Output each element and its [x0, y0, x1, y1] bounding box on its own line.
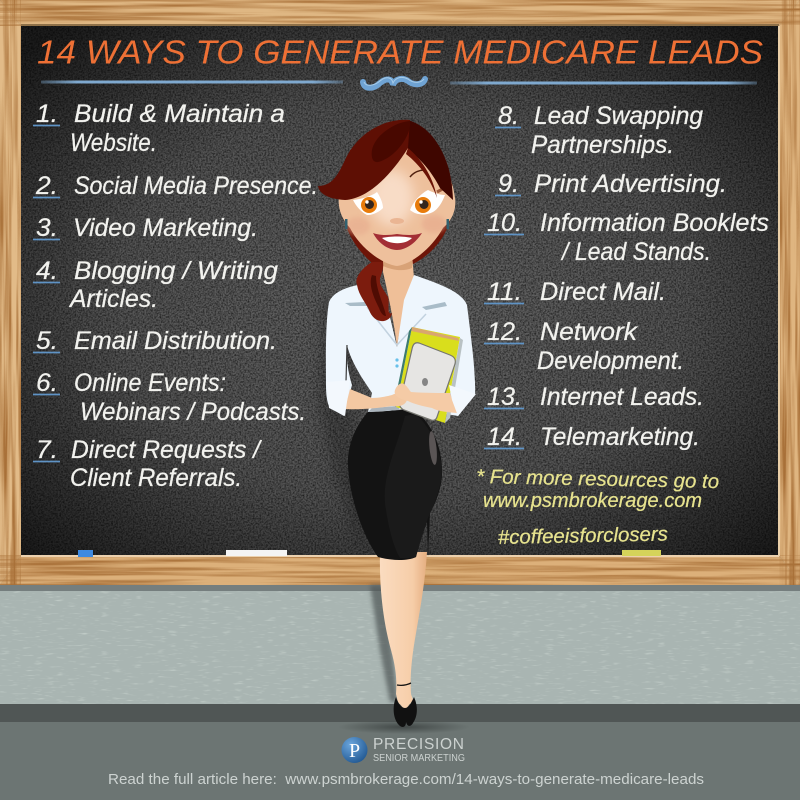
list item 5: 5. — [36, 327, 58, 355]
legs — [380, 552, 427, 710]
blue chalk — [78, 550, 93, 557]
list item 3: 3. — [36, 214, 58, 242]
list item 11: 11. — [487, 278, 522, 306]
list item 11 — [484, 278, 666, 306]
woman illustration — [318, 120, 476, 734]
yellow chalk — [622, 550, 661, 556]
list item 14: 14. — [487, 423, 522, 451]
earrings — [345, 219, 449, 229]
left eye — [353, 192, 383, 215]
arms — [327, 380, 476, 416]
list item 10: Information Booklets — [540, 209, 769, 237]
skirt — [348, 410, 442, 560]
hair — [318, 120, 453, 200]
title divider with flourish — [41, 77, 757, 88]
mouth — [373, 233, 422, 250]
shirt — [326, 275, 475, 416]
logo globe: P — [349, 740, 360, 762]
neck and chest — [383, 255, 414, 347]
hashtag: #coffeeisforclosers — [498, 523, 668, 549]
list item 10 — [484, 209, 769, 266]
resources note: www.psmbrokerage.com — [483, 490, 702, 512]
list item 8: Lead Swapping — [534, 102, 703, 130]
list item 8: 8. — [498, 102, 519, 130]
list item 1: 1. — [36, 100, 58, 128]
wooden frame — [0, 0, 800, 585]
list item 10: 10. — [487, 209, 522, 237]
list item 12: Network — [540, 318, 639, 346]
resources note — [476, 466, 719, 512]
list item 4: Blogging / Writing — [74, 257, 278, 285]
board shadow — [318, 300, 365, 556]
list item 9: Print Advertising. — [534, 170, 727, 198]
list item 4 — [33, 257, 278, 313]
list item 13: 13. — [487, 383, 522, 411]
back hair — [345, 128, 453, 264]
list item 1 — [33, 100, 285, 157]
list item 1: Website. — [70, 129, 157, 157]
list item 7: Client Referrals. — [70, 464, 242, 492]
list item 3: Video Marketing. — [73, 214, 258, 242]
list item 6: Online Events: — [74, 369, 226, 397]
baseboard — [0, 704, 800, 722]
list item 14: Telemarketing. — [540, 423, 700, 451]
list item 2: 2. — [35, 172, 58, 200]
list item 6: Webinars / Podcasts. — [80, 398, 306, 426]
logo tagline: SENIOR MARKETING — [373, 753, 465, 764]
floor — [0, 722, 800, 800]
list item 6 — [33, 369, 306, 426]
list item 1: Build & Maintain a — [74, 100, 285, 128]
list item 7: Direct Requests / — [71, 436, 263, 464]
floor shadow — [338, 720, 470, 734]
list item 6: 6. — [36, 369, 58, 397]
ponytail — [356, 262, 392, 321]
wall shadow — [370, 585, 398, 702]
list item 5: Email Distribution. — [74, 327, 277, 355]
list item 2: Social Media Presence. — [74, 172, 318, 200]
list item 10: / Lead Stands. — [560, 238, 711, 266]
shoe — [394, 697, 417, 727]
list item 12: 12. — [487, 318, 522, 346]
list item 7 — [33, 436, 263, 492]
white chalk — [226, 550, 287, 556]
list item 11: Direct Mail. — [540, 278, 666, 306]
footer link: Read the full article here: www.psmbrokerage.com/14-ways-to-generate-medicare-leads — [108, 771, 704, 788]
list item 12: Development. — [537, 347, 684, 375]
wall — [0, 585, 800, 705]
books and tablet — [394, 327, 463, 423]
list item 8 — [495, 102, 703, 159]
list item 13: Internet Leads. — [540, 383, 704, 411]
list item 12 — [484, 318, 684, 375]
list item 9: 9. — [498, 170, 519, 198]
chalkboard — [20, 25, 780, 556]
nose — [390, 218, 404, 224]
list item 4: 4. — [36, 257, 58, 285]
resources note: * For more resources go to — [476, 466, 719, 493]
list item 4: Articles. — [68, 285, 158, 313]
title: 14 WAYS TO GENERATE MEDICARE LEADS — [37, 34, 763, 70]
logo — [342, 736, 465, 764]
list item 8: Partnerships. — [531, 131, 674, 159]
face — [339, 148, 455, 266]
list item 7: 7. — [36, 436, 58, 464]
logo name: PRECISION — [373, 736, 464, 753]
right eye — [410, 170, 452, 214]
